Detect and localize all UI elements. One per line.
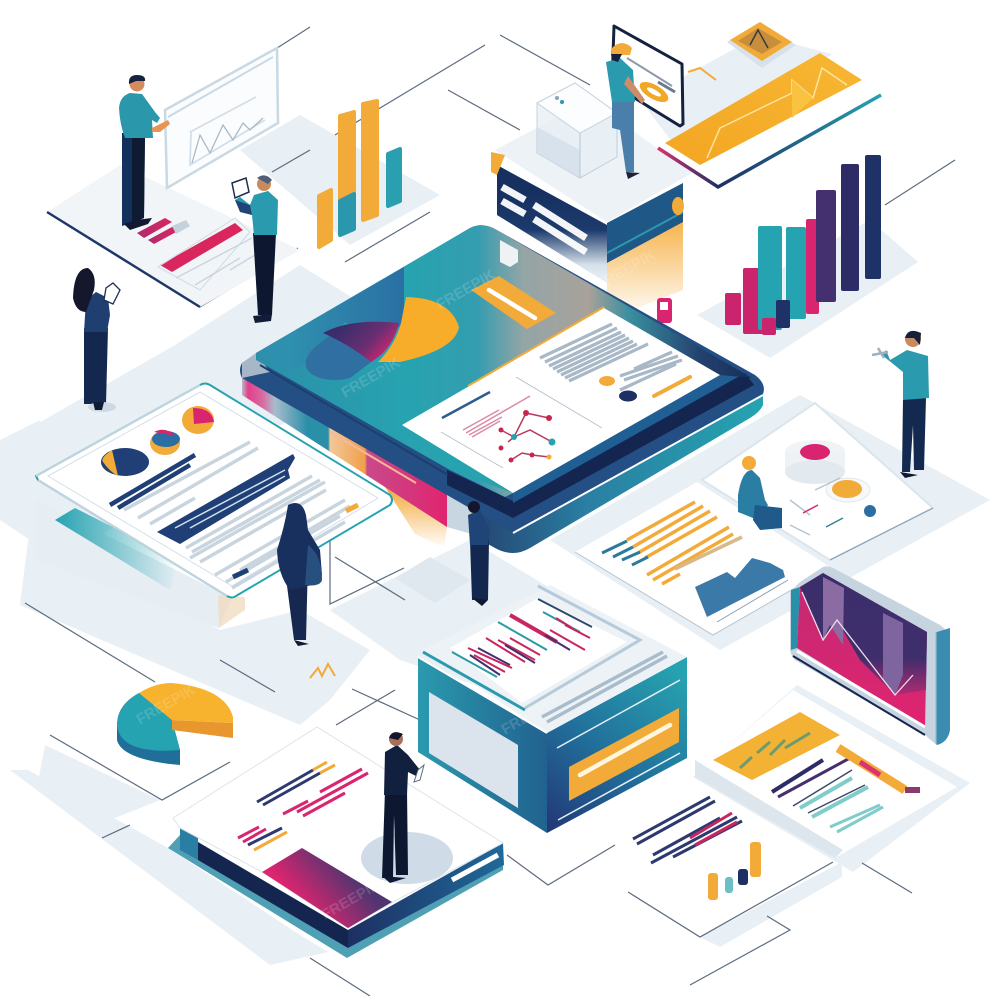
side band	[242, 363, 447, 527]
report base block	[36, 500, 232, 628]
body silhouette	[240, 225, 764, 533]
panel: bottom centre box	[418, 585, 687, 833]
pink legend bars	[137, 218, 172, 238]
watermark: FREEPIK	[594, 246, 658, 293]
pie chart: bottom left	[117, 683, 233, 765]
bar chart: top right	[725, 155, 881, 335]
top face	[495, 100, 692, 222]
orange fade	[385, 487, 447, 548]
person: worker in hard hat	[606, 43, 645, 179]
small yellow sparkline	[310, 664, 335, 678]
lower left grey panel	[447, 490, 475, 535]
screen	[797, 573, 927, 727]
panel: bottom document with mini bars	[633, 797, 761, 900]
central tablet	[240, 225, 764, 553]
panel: bottom right document	[695, 690, 957, 858]
box labels	[502, 187, 586, 252]
yellow label	[569, 708, 679, 801]
person: hooded woman	[277, 503, 322, 646]
teal face	[256, 225, 752, 497]
watermark: FREEPIK	[134, 681, 198, 728]
dark rim stripe	[447, 373, 754, 518]
watermark: FREEPIK	[434, 266, 498, 313]
network graph	[442, 392, 556, 462]
watermark: FREEPIK	[498, 691, 563, 738]
report text lines	[124, 442, 350, 588]
panel: yellow line chart card	[658, 53, 882, 187]
yellow tag	[471, 276, 556, 329]
panel: yellow bars document	[575, 482, 830, 635]
watermark: FREEPIK	[338, 354, 403, 401]
holographic chart screen	[165, 48, 278, 188]
small bracket arrow	[688, 68, 716, 80]
box top	[423, 585, 687, 733]
white slot	[452, 855, 498, 880]
panel: right monitor	[790, 566, 950, 745]
teal under document	[402, 383, 513, 493]
glass cube	[537, 83, 617, 178]
panel: left report	[36, 384, 392, 628]
gradient block	[262, 848, 392, 928]
person: dark suited man	[382, 732, 424, 883]
pink tag	[657, 298, 672, 323]
mini pies	[101, 448, 149, 476]
person: man with tool	[872, 331, 929, 478]
watermark	[134, 246, 658, 923]
white edge line	[513, 395, 763, 533]
report sheet	[36, 384, 392, 598]
peg	[500, 240, 518, 267]
small yellow card	[727, 22, 796, 68]
small coins	[599, 376, 615, 386]
person: analyst with tablet	[232, 175, 278, 323]
panel: top-left floor	[47, 165, 300, 307]
person: analyst at screen	[119, 75, 170, 230]
red stripe	[160, 223, 243, 272]
panel: seated person document	[702, 403, 933, 560]
lines on platform	[257, 770, 320, 805]
document on top	[450, 598, 627, 703]
bottom teal strip	[470, 392, 763, 553]
watermark: FREEPIK	[318, 876, 383, 923]
person: woman with tablet	[73, 268, 120, 412]
panel: bottom left platform	[168, 727, 504, 958]
floor shadows	[395, 557, 470, 603]
pie chart	[256, 267, 459, 380]
tablet with chart	[612, 26, 683, 126]
panel: top box with glass cube	[491, 83, 692, 320]
person: dark figure by tablet	[468, 501, 490, 606]
document text lines	[540, 324, 682, 390]
pale left corner	[242, 353, 270, 378]
white document	[402, 308, 720, 493]
bar chart: top centre	[319, 101, 400, 247]
